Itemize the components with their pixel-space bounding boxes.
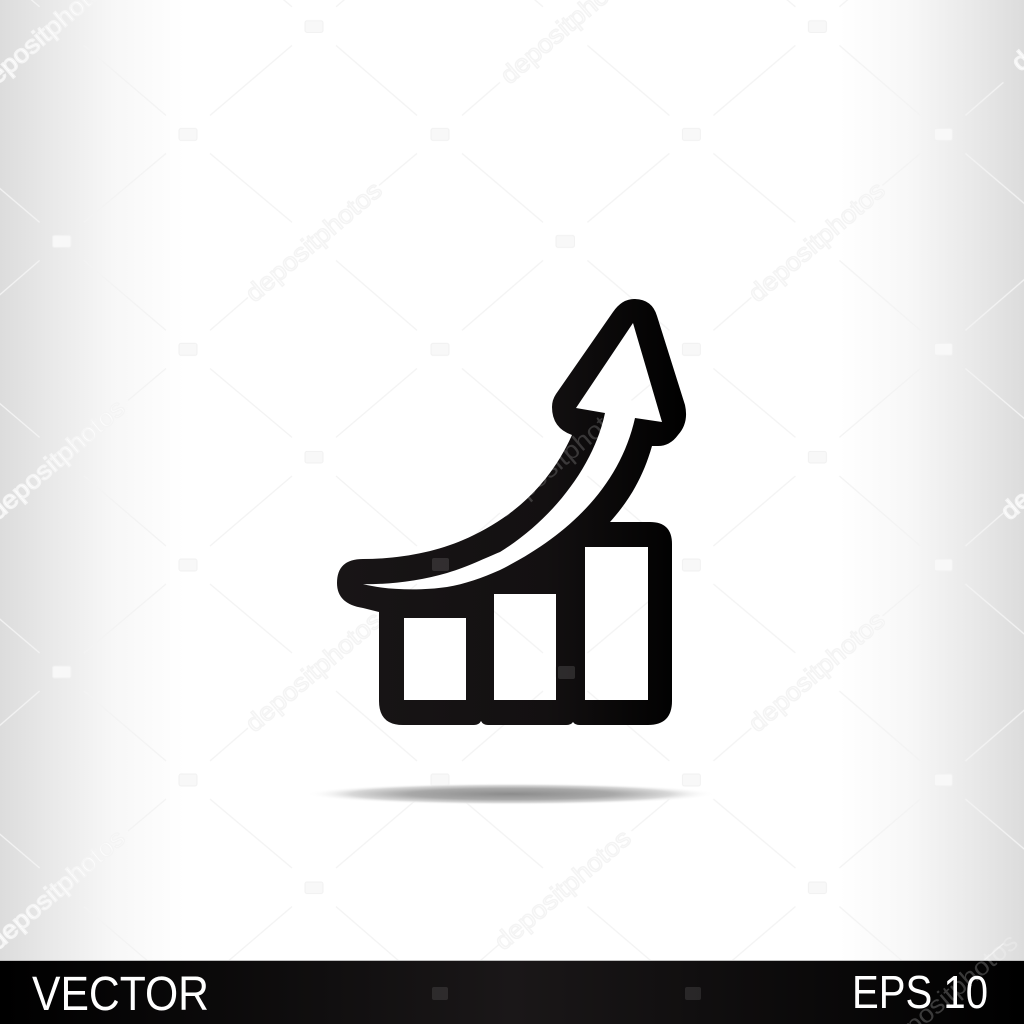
watermark text: depositphotos [240, 176, 388, 308]
floor shadow [306, 783, 716, 805]
footer bar [0, 928, 1024, 1024]
watermark over icon: depositphotos [489, 392, 637, 524]
footer camera marks [432, 987, 701, 1000]
watermark text: depositphotos [743, 176, 891, 308]
watermark text: depositphotos [240, 606, 388, 738]
watermark over icon [432, 392, 637, 679]
watermark text: depositphotos [489, 824, 637, 956]
footer label: vector: VECTOR [32, 968, 209, 1021]
footer label: eps 10: EPS 10 [852, 966, 988, 1018]
icon: bar chart with rising arrow [337, 299, 686, 725]
watermark text: depositphotos [743, 606, 891, 738]
